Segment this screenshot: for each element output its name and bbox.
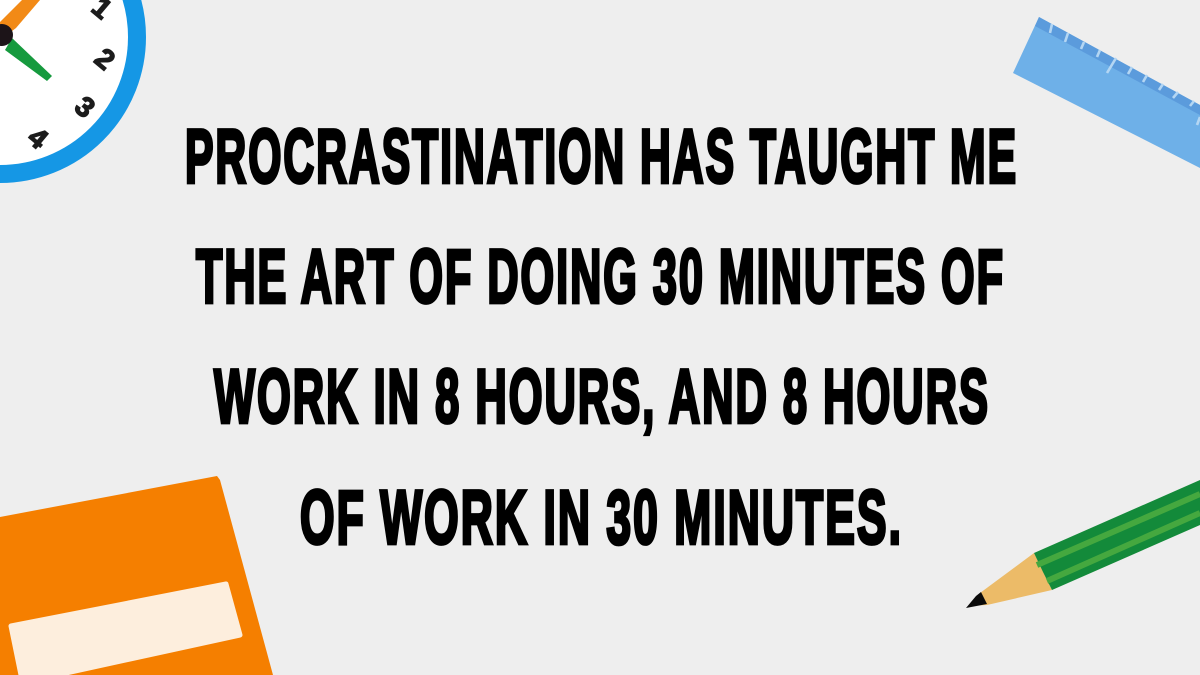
icon: wall clock: 4 xyxy=(22,121,54,155)
icon: wall clock: 3 xyxy=(69,90,101,124)
icon: wall clock xyxy=(0,0,137,174)
icon: wall clock: 2 xyxy=(89,42,121,76)
icon: orange notebook xyxy=(0,476,273,675)
icon: ruler xyxy=(1013,17,1200,168)
icon: green pencil xyxy=(966,480,1200,608)
quote text xyxy=(185,114,1018,560)
notebook label xyxy=(11,584,240,675)
